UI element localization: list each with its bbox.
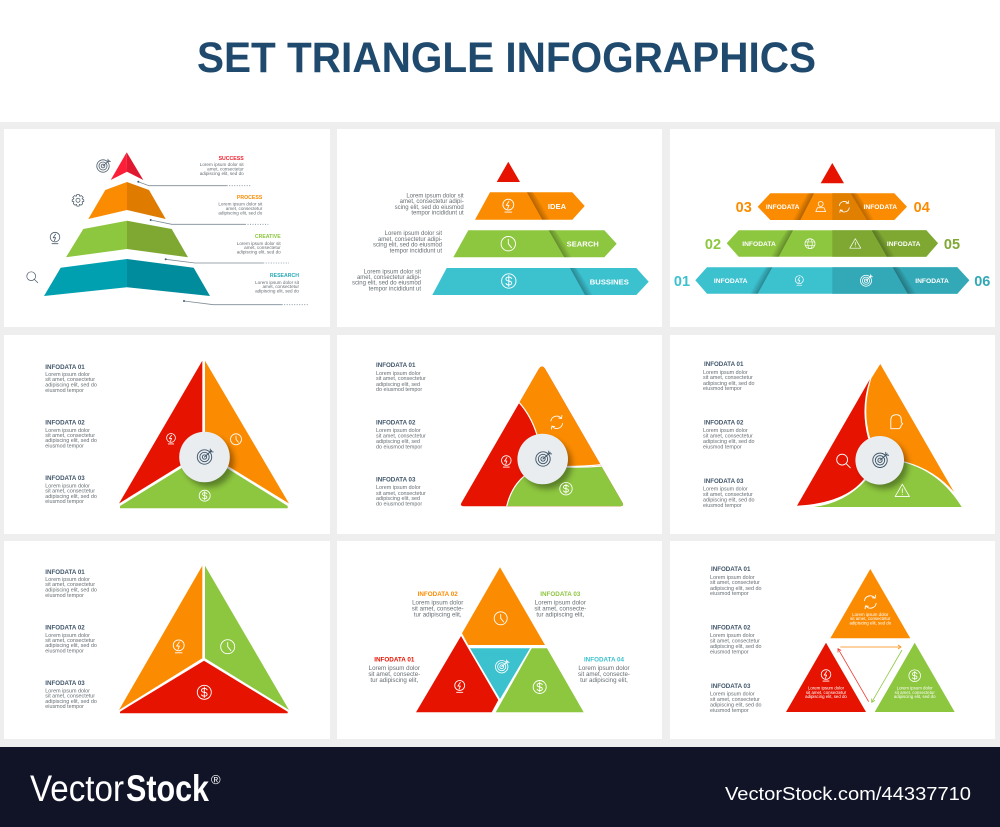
icon: target: [97, 159, 110, 172]
hub circle: [179, 432, 234, 487]
text block: search: [373, 231, 442, 255]
segment: green: [814, 460, 962, 507]
text: infodata 03: do eiusmod tempor: [376, 502, 422, 508]
text: process: amet, consectetur: [226, 206, 263, 211]
text: infodata 03: INFODATA 03: [45, 475, 85, 482]
text: infodata 03: eiusmod tempor: [710, 708, 749, 714]
text: infodata 03: sit amet, consectetur: [710, 697, 760, 703]
icon: person: [816, 201, 826, 212]
red tip triangle: [497, 162, 520, 182]
white text: red: sit amet, consectetur: [806, 690, 847, 695]
text: infodata 01: adipiscing elit, sed do: [703, 381, 755, 387]
segment: orange: [462, 567, 545, 645]
text: infodata 03: eiusmod tempor: [703, 503, 742, 509]
arrow: green: [872, 650, 902, 702]
text: infodata 02: [710, 624, 762, 656]
text: infodata 01: [45, 364, 97, 394]
text block: idea: amet, consectetur adipi-: [400, 199, 464, 205]
triangle: green: [875, 643, 955, 712]
icon: dollar: [502, 274, 516, 288]
text: infodata 01: Lorem ipsum dolor: [710, 575, 755, 581]
text: infodata 01: sit amet, consectetur: [703, 375, 753, 381]
text block: bussines: scing elit, sed do eiusmod: [352, 281, 421, 287]
panel: four-part triangle: [337, 541, 662, 739]
segment: red: [460, 366, 624, 506]
text: infodata 03: [45, 475, 97, 505]
text: infodata 03: sit amet, consectetur: [45, 488, 95, 494]
text: infodata 02: adipiscing elit, sed: [376, 439, 420, 445]
text: infodata 02: sit amet, consectetur: [45, 433, 95, 439]
panel: rounded triangle with curved segments: [337, 335, 662, 534]
text: infodata 01: Lorem ipsum dolor: [369, 665, 420, 672]
text: infodata 01: adipiscing elit, sed do: [710, 586, 762, 592]
text: infodata 02: sit amet, consectetur: [376, 434, 426, 440]
white text: orange: [849, 612, 892, 626]
text: infodata 04: sit amet, consecte-: [578, 671, 630, 678]
text: infodata 02: sit amet, consectetur: [710, 638, 760, 644]
segment: red: [416, 636, 498, 712]
text: infodata 03: sit amet, consectetur: [376, 491, 426, 497]
text block: bussines: tempor incididunt ut: [369, 287, 421, 293]
panel: six-step pyramid: [670, 129, 995, 327]
text: infodata 02: sit amet, consectetur: [703, 434, 753, 440]
segment: red: [119, 361, 202, 504]
text: infodata 01: eiusmod tempor: [45, 593, 84, 599]
segment: red: [120, 661, 288, 713]
text: infodata 01: adipiscing elit, sed: [376, 382, 420, 388]
text: research: [255, 273, 300, 294]
text: infodata 01: Lorem ipsum dolor: [703, 370, 748, 376]
text block: idea: scing elit, sed do eiusmod: [395, 205, 464, 211]
text: infodata 03: [710, 683, 762, 714]
orange arrow bar: [475, 192, 585, 220]
text: infodata 02: eiusmod tempor: [710, 650, 749, 656]
text: infodata 02: Lorem ipsum dolor: [412, 600, 463, 607]
text: infodata 02: Lorem ipsum dolor: [45, 428, 90, 434]
text: infodata 01: sit amet, consecte-: [368, 671, 420, 678]
text: infodata 02: eiusmod tempor: [45, 444, 84, 450]
icon: dollar: [560, 482, 572, 495]
green arrow bar: [453, 230, 617, 257]
bar labels: INFODATA: [915, 278, 949, 285]
text: infodata 01: eiusmod tempor: [703, 386, 742, 392]
icon: target: [873, 452, 889, 468]
icon: clock: [230, 434, 242, 445]
white text: green: sit amet, consectetur: [895, 690, 935, 695]
text: infodata 04: tur adipiscing elit,: [580, 677, 628, 684]
segment: red: [797, 379, 880, 506]
green row: [727, 230, 938, 257]
text: infodata 01: INFODATA 01: [45, 569, 85, 576]
text: infodata 03: [534, 591, 586, 619]
text: infodata 04: INFODATA 04: [584, 656, 625, 663]
bar labels: INFODATA: [864, 204, 897, 211]
icon: target: [496, 660, 509, 673]
teal row: [695, 267, 969, 294]
text: infodata 03: eiusmod tempor: [45, 704, 84, 710]
text: infodata 02: INFODATA 02: [45, 624, 85, 632]
text: process: PROCESS: [237, 195, 263, 201]
text: infodata 03: sit amet, consectetur: [703, 492, 753, 498]
text: infodata 03: adipiscing elit, sed do: [710, 702, 762, 708]
text: research: RESEARCH: [270, 273, 299, 279]
panel: arrow pyramid: [337, 129, 662, 327]
white text: red: adipiscing elit, sed do: [805, 694, 847, 699]
text: infodata 03: INFODATA 03: [376, 476, 416, 484]
icon: search: [27, 272, 38, 283]
bar labels: INFODATA: [766, 204, 800, 211]
icon: dollar: [197, 685, 211, 699]
text: infodata 02: INFODATA 02: [376, 420, 416, 426]
text: infodata 02: adipiscing elit, sed do: [710, 644, 762, 650]
curved segments: [460, 366, 624, 506]
text: infodata 01: [703, 361, 755, 392]
text: infodata 01: sit amet, consectetur: [710, 580, 760, 586]
white text: red: [805, 686, 847, 699]
text block: search: scing elit, sed do eiusmod: [373, 243, 442, 249]
icon: clock: [221, 640, 235, 654]
step numbers: 03: [736, 200, 752, 216]
text: infodata 01: Lorem ipsum dolor: [45, 372, 90, 378]
pyramid layer: teal: [44, 259, 210, 296]
icon: bulb: [455, 680, 465, 692]
red tip triangle: [821, 163, 844, 183]
footer bar: [0, 747, 1000, 827]
logo: VectorStock: ®: [211, 772, 221, 787]
text: infodata 01: eiusmod tempor: [45, 388, 84, 394]
gallery backdrop: [0, 122, 1000, 747]
text: infodata 01: eiusmod tempor: [710, 591, 749, 597]
icon: warning: [850, 239, 861, 248]
step numbers: [674, 200, 990, 290]
text: infodata 03: [45, 680, 97, 710]
logo: VectorStock: [30, 768, 221, 809]
white text: green: Lorem ipsum dolor: [897, 686, 933, 690]
text: infodata 03: eiusmod tempor: [45, 499, 84, 505]
step numbers: 05: [944, 237, 960, 253]
text: success: [200, 156, 244, 176]
text: infodata 03: INFODATA 03: [704, 478, 744, 485]
text: infodata 02: INFODATA 02: [704, 420, 744, 426]
text: infodata 01: Lorem ipsum dolor: [45, 577, 90, 583]
title: SET TRIANGLE INFOGRAPHICS: [197, 34, 816, 82]
icon: warning: [895, 484, 909, 497]
text: success: SUCCESS: [219, 156, 244, 162]
segment: teal: [470, 648, 530, 699]
segment: orange: [519, 366, 601, 466]
text: infodata 03: sit amet, consectetur: [45, 694, 95, 700]
icon: gear: [72, 194, 84, 206]
text: creative: Lorem ipsum dolor sit: [237, 241, 281, 246]
white text: green: [894, 686, 936, 699]
text: infodata 01: INFODATA 01: [711, 566, 751, 573]
orange row: [758, 193, 907, 220]
text: process: [218, 195, 263, 216]
arrow: orange: [840, 645, 901, 649]
text: infodata 01: INFODATA 01: [704, 361, 744, 368]
text: infodata 02: Lorem ipsum dolor: [710, 633, 755, 639]
text block: idea: Lorem ipsum dolor sit: [406, 193, 464, 199]
image reference: VectorStock.com/44337710: [725, 784, 971, 804]
text block: bussines: Lorem ipsum dolor sit: [364, 269, 421, 275]
label: idea: IDEA: [548, 202, 567, 211]
text: infodata 03: adipiscing elit, sed: [376, 496, 420, 502]
text: infodata 01: sit amet, consectetur: [45, 377, 95, 383]
text: infodata 02: sit amet, consectetur: [45, 638, 95, 644]
text: infodata 02: [45, 624, 97, 654]
text: infodata 02: Lorem ipsum dolor: [376, 428, 421, 434]
teal arrow bar: [432, 268, 649, 295]
step numbers: 02: [705, 237, 721, 253]
pyramid layer: green: [66, 221, 188, 257]
text block: search: tempor incididunt ut: [390, 249, 442, 255]
text: infodata 03: [376, 476, 426, 508]
text: infodata 02: adipiscing elit, sed do: [703, 439, 755, 445]
text: infodata 02: eiusmod tempor: [703, 444, 742, 450]
text: success: amet, consectetur: [207, 166, 244, 172]
text: infodata 02: Lorem ipsum dolor: [45, 633, 90, 639]
text: infodata 01: sit amet, consectetur: [45, 582, 95, 588]
text: infodata 03: Lorem ipsum dolor: [376, 485, 421, 491]
icon: target: [536, 451, 552, 466]
icon: cycle: [551, 415, 563, 429]
text: infodata 01: INFODATA 01: [374, 656, 415, 663]
text: creative: [237, 234, 281, 254]
text: infodata 03: Lorem ipsum dolor: [535, 600, 586, 607]
text: infodata 02: Lorem ipsum dolor: [703, 428, 748, 434]
text: infodata 01: do eiusmod tempor: [376, 387, 422, 393]
text block: idea: tempor incididunt ut: [411, 211, 464, 217]
text: infodata 01: tur adipiscing elit,: [370, 677, 418, 684]
label: search: SEARCH: [567, 240, 599, 248]
icon: globe: [805, 239, 815, 249]
text: infodata 03: INFODATA 03: [45, 680, 85, 687]
text: infodata 03: Lorem ipsum dolor: [710, 692, 755, 698]
white text: orange: Lorem ipsum dolor: [852, 612, 889, 617]
text: infodata 01: INFODATA 01: [376, 362, 416, 369]
text: infodata 02: eiusmod tempor: [45, 648, 84, 654]
bar labels: INFODATA: [714, 278, 748, 285]
icon: bulb: [795, 276, 803, 285]
icon: search: [837, 454, 850, 468]
icon: dollar: [199, 490, 210, 501]
text: infodata 01: adipiscing elit, sed do: [45, 382, 97, 388]
step numbers: 01: [674, 274, 690, 290]
text: infodata 04: [578, 656, 630, 684]
text: creative: amet, consectetur: [244, 245, 281, 250]
text: infodata 02: tur adipiscing elit,: [414, 612, 462, 619]
text: success: adipiscing elit, sed do: [200, 171, 244, 176]
text: creative: CREATIVE: [255, 234, 281, 240]
text: infodata 03: sit amet, consecte-: [534, 606, 586, 613]
arrow: red: [838, 649, 869, 702]
icon: clock: [501, 236, 516, 251]
text block: bussines: [352, 269, 421, 293]
panel: three-part triangle: [4, 541, 330, 739]
text: success: Lorem ipsum dolor sit: [200, 162, 244, 167]
text: infodata 03: Lorem ipsum dolor: [703, 486, 748, 492]
bar labels: INFODATA: [742, 241, 776, 248]
bar labels: [714, 204, 949, 285]
step numbers: 06: [974, 274, 990, 290]
segment: orange: [866, 364, 954, 492]
segment: green: [120, 454, 288, 508]
step numbers: 04: [914, 200, 930, 216]
segment: orange: [119, 566, 202, 710]
hub circle: [855, 436, 908, 489]
icon: cycle: [839, 201, 849, 212]
icon: bulb: [173, 640, 184, 653]
text: infodata 01: [710, 566, 762, 597]
bar labels: INFODATA: [887, 241, 921, 248]
text: process: adipiscing elit, sed do: [218, 210, 263, 216]
label: bussines: BUSSINES: [590, 277, 629, 286]
triangle: red: [786, 643, 866, 712]
text: infodata 03: adipiscing elit, sed do: [703, 498, 755, 504]
hub circle: [517, 434, 572, 489]
text: infodata 01: Lorem ipsum dolor: [376, 371, 421, 377]
text: research: Lorem ipsum dolor sit: [255, 280, 300, 285]
icon: bulb: [502, 456, 511, 467]
text: infodata 01: [368, 656, 420, 684]
text block: idea: [395, 193, 464, 217]
logo: VectorStock: Vector: [30, 768, 124, 809]
pyramid layer: orange: [88, 182, 166, 219]
icon: bulb: [503, 199, 514, 212]
text: infodata 01: INFODATA 01: [45, 364, 85, 371]
segment: orange: [205, 361, 289, 504]
leader lines: [137, 181, 308, 305]
text: infodata 03: INFODATA 03: [540, 591, 581, 598]
icon: target: [197, 449, 213, 464]
icon: head: [891, 415, 903, 429]
icon: bulb: [50, 232, 60, 244]
segment: green: [506, 466, 624, 506]
icon: dollar: [533, 680, 546, 694]
text: infodata 02: [703, 420, 755, 450]
text: infodata 01: [45, 569, 97, 599]
panel: triangle with hub: [4, 335, 330, 534]
icon: clock: [494, 612, 507, 625]
white text: orange: adipiscing elit, sed do: [849, 620, 892, 626]
text: infodata 02: adipiscing elit, sed do: [45, 438, 97, 444]
text: research: adipiscing elit, sed do: [255, 288, 299, 294]
text: infodata 03: [703, 478, 755, 509]
text: research: amet, consectetur: [262, 284, 299, 289]
text: infodata 01: adipiscing elit, sed do: [45, 588, 97, 594]
triangle: orange: [830, 569, 910, 638]
text block: search: amet, consectetur adipi-: [378, 237, 442, 243]
text: infodata 01: [376, 362, 426, 393]
logo: VectorStock: Stock: [126, 768, 209, 809]
text: infodata 03: Lorem ipsum dolor: [45, 688, 90, 694]
segment: green: [205, 566, 289, 710]
text block: search: Lorem ipsum dolor sit: [385, 231, 442, 237]
text: infodata 03: INFODATA 03: [711, 683, 751, 690]
icon: dollar: [909, 670, 920, 682]
icon: bulb: [821, 670, 831, 681]
text: infodata 02: INFODATA 02: [711, 624, 751, 632]
white text: red: Lorem ipsum dolor: [808, 686, 845, 690]
panel: triangle with swirl segments: [670, 335, 995, 534]
icon: target: [860, 275, 873, 286]
text: infodata 02: INFODATA 02: [418, 591, 458, 598]
text: infodata 03: tur adipiscing elit,: [536, 612, 584, 619]
panel: three triangles cycle: [670, 541, 995, 739]
text: infodata 03: adipiscing elit, sed do: [45, 699, 97, 705]
text: infodata 02: [45, 420, 97, 450]
text: infodata 03: adipiscing elit, sed do: [45, 494, 97, 500]
text: infodata 03: Lorem ipsum dolor: [45, 484, 90, 490]
icon: bulb: [167, 434, 175, 444]
text: infodata 02: [412, 591, 464, 619]
panel: 3D layered pyramid: [4, 129, 330, 327]
segment: green: [496, 648, 584, 712]
text: infodata 02: adipiscing elit, sed do: [45, 643, 97, 649]
pyramid tip: red arrow: [111, 152, 143, 180]
text: process: Lorem ipsum dolor sit: [218, 202, 263, 206]
text: infodata 04: Lorem ipsum dolor: [578, 665, 630, 672]
white text: green: adipiscing elit, sed do: [894, 694, 936, 699]
text block: bussines: amet, consectetur adipi-: [357, 275, 421, 281]
text: infodata 02: sit amet, consecte-: [412, 606, 464, 613]
icon: cycle: [864, 595, 876, 609]
text: infodata 02: do eiusmod tempor: [376, 444, 422, 450]
text: creative: adipiscing elit, sed do: [237, 250, 281, 254]
text: infodata 01: sit amet, consectetur: [376, 376, 426, 382]
white text: orange: sit amet, consectetur: [850, 616, 891, 621]
text: infodata 02: [376, 420, 426, 450]
text: infodata 02: INFODATA 02: [45, 420, 85, 426]
